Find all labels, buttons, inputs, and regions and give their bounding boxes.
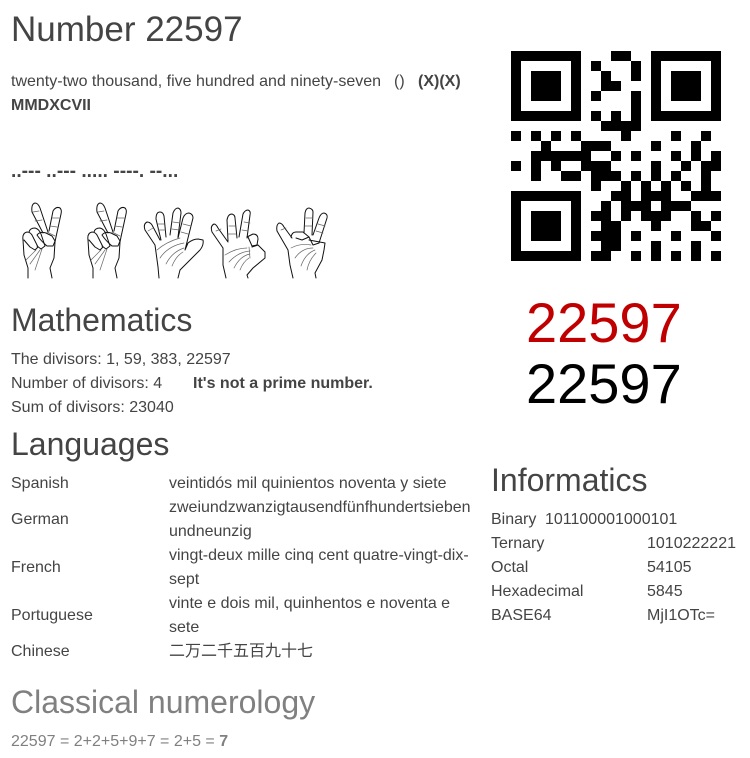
informatics table: BASE64 bbox=[491, 607, 552, 624]
heading: informatics: Informatics bbox=[491, 462, 647, 498]
languages table: Spanish bbox=[11, 475, 69, 492]
informatics table: 54105 bbox=[647, 559, 692, 576]
QR code data modules bbox=[511, 51, 721, 261]
icon: hand sign 5 bbox=[144, 208, 203, 278]
informatics table: MjI1OTc= bbox=[647, 607, 715, 624]
icon: hand sign 2 bbox=[88, 203, 126, 278]
sign language hands bbox=[23, 203, 327, 278]
heading: classical numerology: Classical numerology bbox=[11, 684, 315, 720]
languages table: German bbox=[11, 511, 69, 528]
heading: languages: Languages bbox=[11, 426, 169, 462]
QR code finder patterns bbox=[511, 51, 721, 261]
languages table: sept bbox=[169, 571, 200, 588]
mathematics facts bbox=[11, 351, 373, 416]
icon: hand sign 2 with thumb bbox=[277, 208, 327, 278]
red number: 22597 bbox=[526, 291, 682, 354]
mathematics facts: It's not a prime number. bbox=[193, 375, 373, 392]
informatics table: 101100001000101 bbox=[545, 511, 677, 528]
number in words and roman numeral: (X)(X) bbox=[418, 73, 461, 90]
numerology calculation: 22597 = 2+2+5+9+7 = 2+5 = 7 bbox=[11, 733, 228, 750]
icon: hand sign 4 bbox=[211, 210, 265, 278]
mathematics facts: Number of divisors: 4 bbox=[11, 375, 162, 392]
mathematics facts: The divisors: 1, 59, 383, 22597 bbox=[11, 351, 231, 368]
heading: mathematics: Mathematics bbox=[11, 302, 192, 338]
languages table bbox=[11, 475, 471, 660]
title: Number 22597 bbox=[11, 10, 243, 49]
icon: hand sign 2 bbox=[23, 203, 61, 278]
informatics table: Hexadecimal bbox=[491, 583, 583, 600]
languages table: veintidós mil quinientos noventa y siete bbox=[169, 475, 447, 492]
informatics table: Octal bbox=[491, 559, 528, 576]
languages table: Chinese bbox=[11, 643, 70, 660]
number in words and roman numeral: twenty-two thousand, five hundred and ninety-seven bbox=[11, 73, 381, 90]
mathematics facts: Sum of divisors: 23040 bbox=[11, 399, 174, 416]
languages table: vinte e dois mil, quinhentos e noventa e bbox=[169, 595, 450, 612]
informatics table bbox=[491, 511, 736, 624]
number in words and roman numeral: MMDXCVII bbox=[11, 97, 91, 114]
languages table: vingt-deux mille cinq cent quatre-vingt-dix- bbox=[169, 547, 469, 564]
languages table: zweiundzwanzigtausendfünfhundertsieben bbox=[169, 499, 471, 516]
languages table: sete bbox=[169, 619, 199, 636]
number in words and roman numeral: () bbox=[394, 73, 405, 90]
informatics table: 1010222221 bbox=[647, 535, 736, 552]
morse code: ..--- ..--- ..... ----. --... bbox=[11, 161, 178, 182]
number in words and roman numeral bbox=[11, 73, 461, 114]
black number: 22597 bbox=[526, 352, 682, 415]
languages table: 二万二千五百九十七 bbox=[169, 642, 313, 660]
languages table: undneunzig bbox=[169, 523, 252, 540]
informatics table: 5845 bbox=[647, 583, 683, 600]
languages table: Portuguese bbox=[11, 607, 93, 624]
informatics table: Ternary bbox=[491, 535, 544, 552]
languages table: French bbox=[11, 559, 61, 576]
informatics table: Binary bbox=[491, 511, 536, 528]
